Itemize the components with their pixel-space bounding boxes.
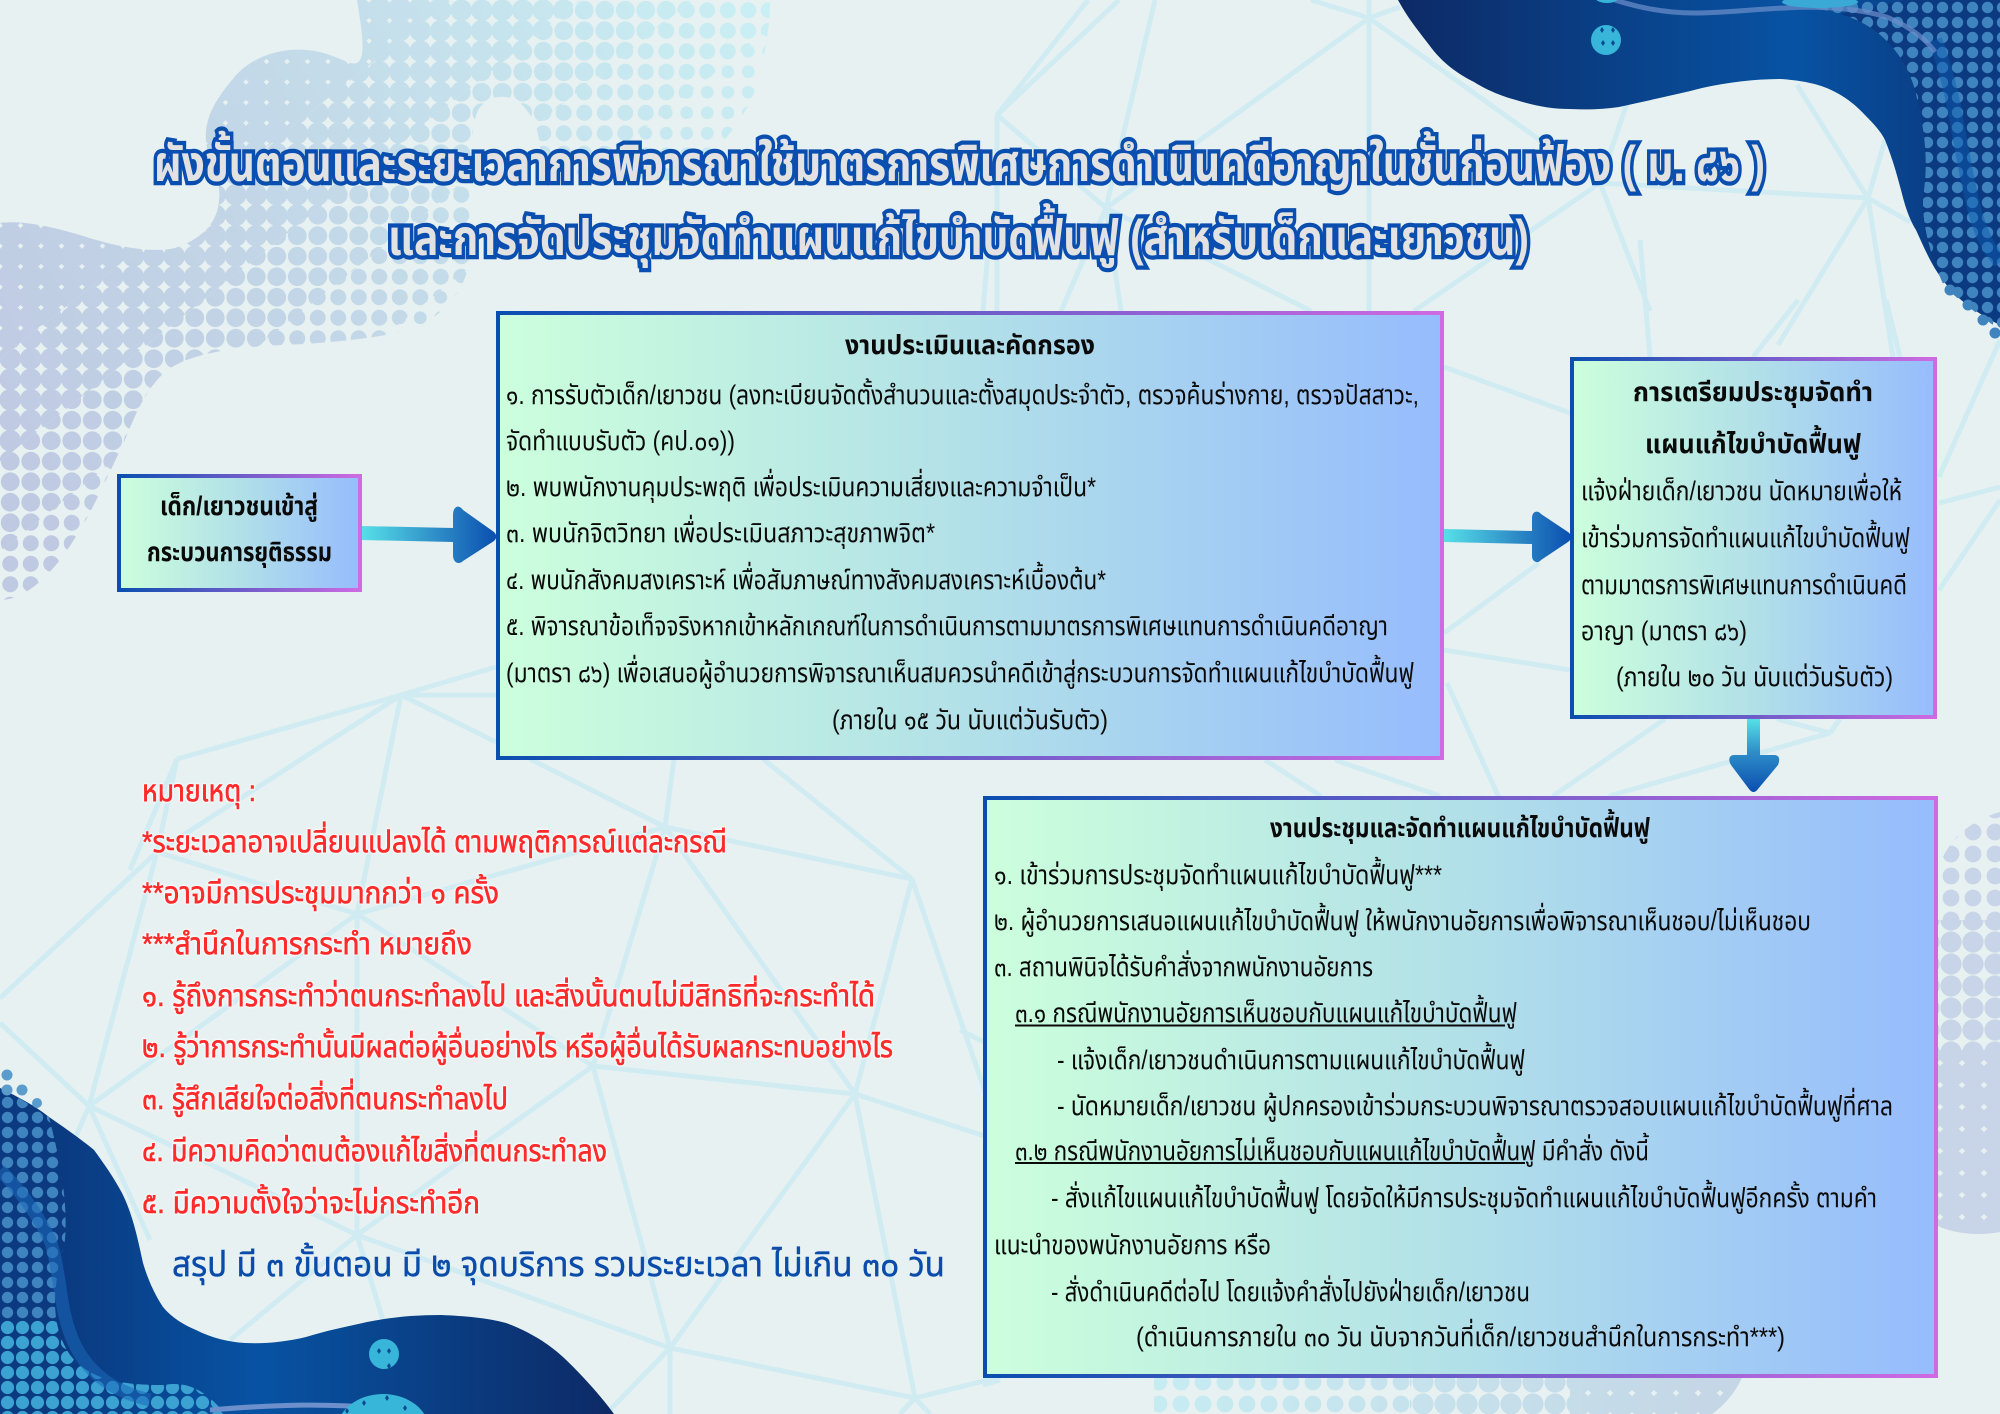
box: meeting and plan making: งานประชุมและจัดทำแผนแก้ไขบำบัดฟื้นฟู bbox=[1270, 809, 1651, 844]
box: meeting and plan making: ๑. เข้าร่วมการประชุมจัดทำแผนแก้ไขบำบัดฟื้นฟู*** bbox=[994, 856, 1442, 891]
box: meeting and plan making bbox=[985, 798, 1936, 1376]
halftone blob: top left bbox=[0, 0, 800, 620]
box: child enters justice process bbox=[119, 476, 360, 590]
notes: ๒. รู้ว่าการกระทำนั้นมีผลต่อผู้อื่นอย่างไร หรือผู้อื่นได้รับผลกระทบอย่างไร bbox=[142, 1026, 893, 1065]
box: preparation for plan meeting: เข้าร่วมการจัดทำแผนแก้ไขบำบัดฟื้นฟู bbox=[1581, 519, 1910, 554]
box: screening and assessment: (ภายใน ๑๕ วัน นับแต่วันรับตัว) bbox=[832, 705, 1108, 735]
arrow: to preparation bbox=[1444, 512, 1571, 562]
notes: **อาจมีการประชุมมากกว่า ๑ ครั้ง bbox=[142, 874, 499, 911]
icon: turquoise dot bbox=[1591, 25, 1621, 55]
notes bbox=[142, 775, 893, 1220]
arrow: to screening bbox=[362, 507, 496, 563]
title bbox=[154, 131, 1765, 268]
dots: top right bbox=[1780, 0, 2000, 335]
arrow: down to meeting bbox=[1729, 719, 1779, 792]
box: preparation for plan meeting: (ภายใน ๒๐ วัน นับแต่วันรับตัว) bbox=[1616, 662, 1893, 692]
summary: สรุป มี ๓ ขั้นตอน มี ๒ จุดบริการ รวมระยะเวลา ไม่เกิน ๓๐ วัน bbox=[172, 1242, 945, 1285]
notes: *ระยะเวลาอาจเปลี่ยนแปลงได้ ตามพฤติการณ์แต่ละกรณี bbox=[142, 821, 727, 859]
dots: bottom left bbox=[0, 1080, 230, 1414]
notes: หมายเหตุ : bbox=[142, 775, 256, 809]
box: meeting and plan making: - สั่งดำเนินคดีต่อไป โดยแจ้งคำสั่งไปยังฝ่ายเด็ก/เยาวชน bbox=[1051, 1275, 1530, 1307]
box: preparation for plan meeting: ตามมาตรการพิเศษแทนการดำเนินคดี bbox=[1581, 570, 1907, 600]
box: preparation for plan meeting: การเตรียมประชุมจัดทำ bbox=[1633, 377, 1873, 408]
notes: ***สำนึกในการกระทำ หมายถึง bbox=[142, 928, 472, 961]
decorative wave: top right bbox=[1398, 0, 2000, 338]
box: screening and assessment bbox=[498, 313, 1442, 758]
box: meeting and plan making: ๒. ผู้อำนวยการเสนอแผนแก้ไขบำบัดฟื้นฟู ให้พนักงานอัยการเพื่อพิจารณาเห็นชอบ/ไม่เห็นชอบ bbox=[994, 902, 1811, 937]
box: preparation for plan meeting: แผนแก้ไขบำบัดฟื้นฟู bbox=[1645, 425, 1862, 460]
box: meeting and plan making: ๓.๑ กรณีพนักงานอัยการเห็นชอบกับแผนแก้ไขบำบัดฟื้นฟู bbox=[1015, 994, 1517, 1029]
box: preparation for plan meeting bbox=[1572, 359, 1935, 717]
box: screening and assessment: ๔. พบนักสังคมสงเคราะห์ เพื่อสัมภาษณ์ทางสังคมสงเคราะห์เบื้องต้น* bbox=[506, 561, 1106, 595]
box: screening and assessment: (มาตรา ๘๖) เพื่อเสนอผู้อำนวยการพิจารณาเห็นสมควรนำคดีเข้าสู่กระบวนการจัดทำแผนแก้ไขบำบัดฟื้นฟู bbox=[506, 654, 1414, 689]
box: screening and assessment: จัดทำแบบรับตัว (คป.๐๑)) bbox=[506, 426, 735, 456]
box: screening and assessment: ๑. การรับตัวเด็ก/เยาวชน (ลงทะเบียนจัดตั้งสำนวนและตั้งสมุดประจำตัว, ตรวจค้นร่างกาย, ตรวจปัสสาวะ, bbox=[506, 378, 1419, 411]
box: preparation for plan meeting: อาญา (มาตรา ๘๖) bbox=[1581, 616, 1747, 646]
icon: turquoise dot bbox=[369, 1339, 399, 1369]
box: meeting and plan making: - แจ้งเด็ก/เยาวชนดำเนินการตามแผนแก้ไขบำบัดฟื้นฟู bbox=[1057, 1041, 1525, 1076]
box: meeting and plan making: แนะนำของพนักงานอัยการ หรือ bbox=[994, 1230, 1271, 1260]
box: meeting and plan making: ๓. สถานพินิจได้รับคำสั่งจากพนักงานอัยการ bbox=[994, 950, 1373, 982]
box: meeting and plan making: ๓.๒ กรณีพนักงานอัยการไม่เห็นชอบกับแผนแก้ไขบำบัดฟื้นฟู มีคำสั่ง ดังนี้ bbox=[1015, 1132, 1649, 1167]
box: screening and assessment: งานประเมินและคัดกรอง bbox=[845, 330, 1095, 360]
notes: ๔. มีความคิดว่าตนต้องแก้ไขสิ่งที่ตนกระทำลง bbox=[142, 1130, 607, 1168]
box: screening and assessment: ๕. พิจารณาข้อเท็จจริงหากเข้าหลักเกณฑ์ในการดำเนินการตามมาตรการพิเศษแทนการดำเนินคดีอาญา bbox=[506, 611, 1388, 641]
decorative wave: bottom left bbox=[0, 1070, 614, 1414]
halftone blob: right edge bbox=[1938, 812, 2000, 1234]
box: child enters justice process: กระบวนการยุติธรรม bbox=[147, 537, 332, 568]
turquoise bump bbox=[337, 1394, 429, 1414]
title: และการจัดประชุมจัดทำแผนแก้ไขบำบัดฟื้นฟู (สำหรับเด็กและเยาวชน) bbox=[388, 203, 1529, 268]
box: preparation for plan meeting: แจ้งฝ่ายเด็ก/เยาวชน นัดหมายเพื่อให้ bbox=[1581, 472, 1902, 506]
notes: ๑. รู้ถึงการกระทำว่าตนกระทำลงไป และสิ่งนั้นตนไม่มีสิทธิที่จะกระทำได้ bbox=[142, 975, 875, 1014]
notes: ๓. รู้สึกเสียใจต่อสิ่งที่ตนกระทำลงไป bbox=[142, 1078, 508, 1117]
box: screening and assessment: ๓. พบนักจิตวิทยา เพื่อประเมินสภาวะสุขภาพจิต* bbox=[506, 514, 935, 549]
box: screening and assessment: ๒. พบพนักงานคุมประพฤติ เพื่อประเมินความเสี่ยงและความจำเป็น* bbox=[506, 468, 1096, 503]
notes: ๕. มีความตั้งใจว่าจะไม่กระทำอีก bbox=[142, 1184, 480, 1220]
halftone blob: bottom centre bbox=[1154, 1378, 1742, 1414]
box: meeting and plan making: (ดำเนินการภายใน ๓๐ วัน นับจากวันที่เด็ก/เยาวชนสำนึกในการกระทำ***) bbox=[1136, 1318, 1785, 1352]
box: child enters justice process: เด็ก/เยาวชนเข้าสู่ bbox=[160, 491, 318, 522]
